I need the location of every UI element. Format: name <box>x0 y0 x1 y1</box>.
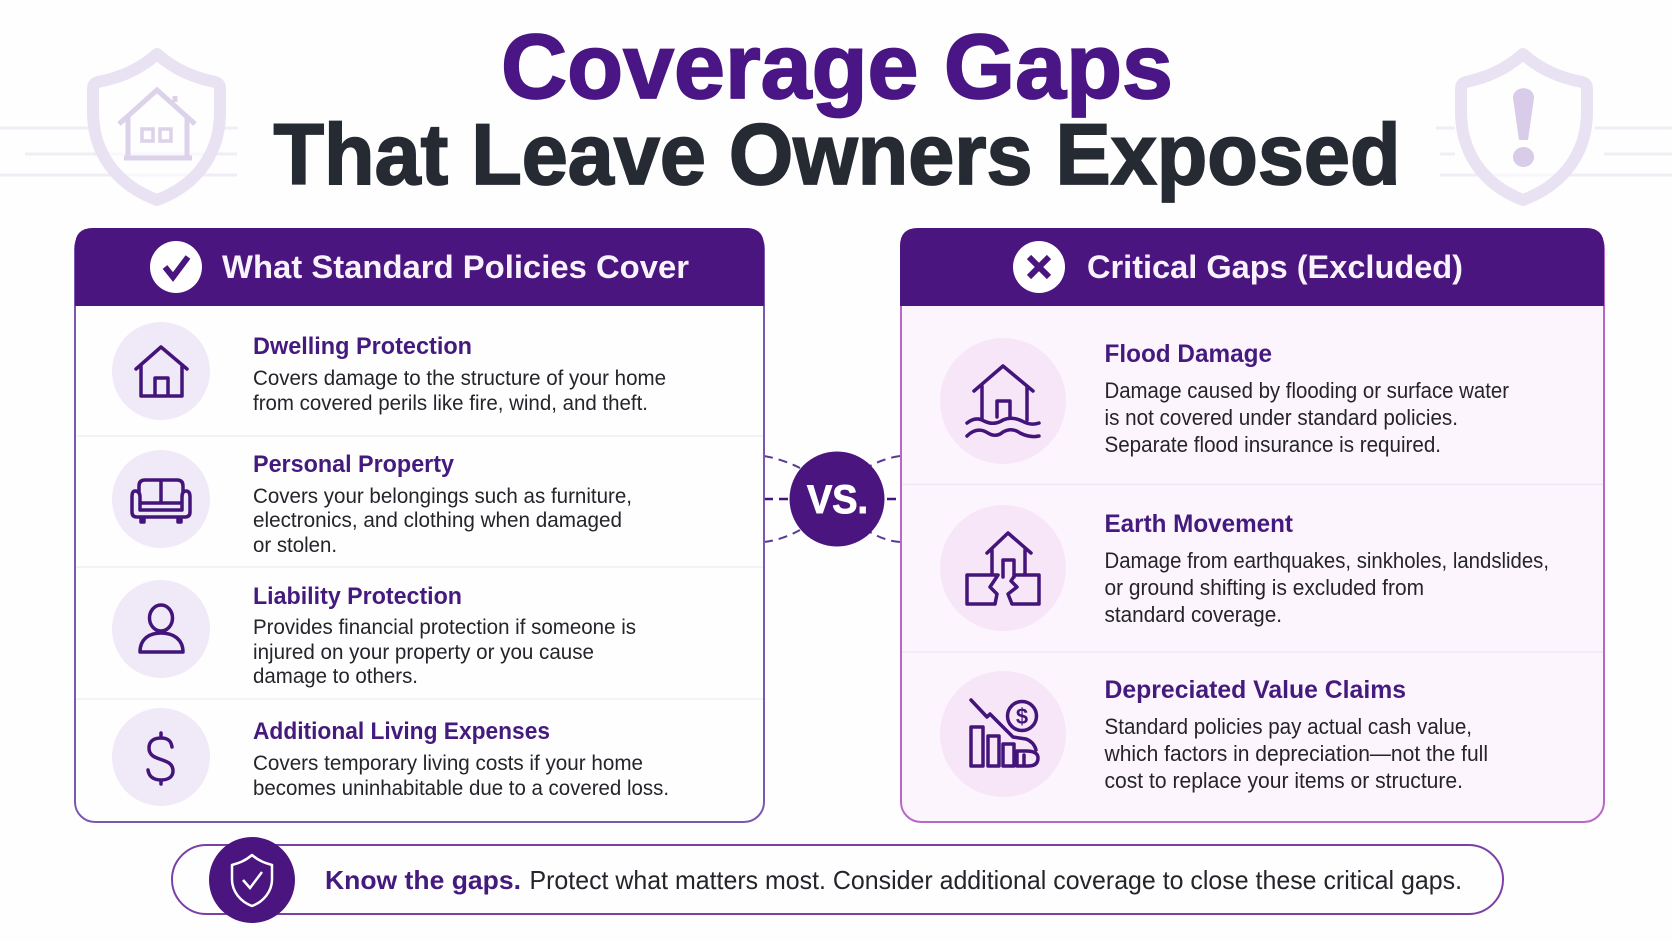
item: personal property: electronics, and clothing when damaged <box>253 509 622 532</box>
item: liability protection: Liability Protection <box>253 583 462 610</box>
item: earth movement <box>940 505 1549 631</box>
icon: shield with exclamation mark <box>1461 54 1587 200</box>
header bar: excluded <box>900 228 1604 306</box>
item: depreciated value claims <box>940 671 1488 797</box>
item: earth movement: standard coverage. <box>1104 602 1282 627</box>
item: flood damage: Separate flood insurance is required. <box>1104 432 1441 457</box>
item: additional living expenses: Covers temporary living costs if your home <box>253 752 643 775</box>
item: depreciated value claims: which factors in depreciation—not the full <box>1104 741 1488 766</box>
item: additional living expenses: Additional Living Expenses <box>253 718 550 745</box>
item: flood damage: is not covered under standard policies. <box>1104 405 1458 430</box>
callout text: Know the gaps. <box>325 865 521 895</box>
item: liability protection: damage to others. <box>253 665 418 688</box>
item: flood damage <box>940 338 1509 464</box>
item: additional living expenses: becomes uninhabitable due to a covered loss. <box>253 777 669 800</box>
connector: VS dashed lines <box>764 456 900 542</box>
callout text: Protect what matters most. Consider additional coverage to close these critical gaps. <box>530 865 1462 895</box>
item: dwelling protection: from covered perils like fire, wind, and theft. <box>253 392 648 415</box>
callout: know the gaps <box>172 837 1503 923</box>
item: depreciated value claims: $ <box>1016 704 1028 729</box>
item: flood damage: Damage caused by flooding or surface water <box>1104 378 1509 403</box>
header bar: covered: What Standard Policies Cover <box>222 249 689 285</box>
badge: VS: VS. <box>807 478 868 522</box>
icon: shield with house <box>93 54 220 200</box>
item: earth movement: or ground shifting is excluded from <box>1104 575 1424 600</box>
header bar: covered <box>75 228 764 306</box>
item: personal property: or stolen. <box>253 534 337 557</box>
title: That Leave Owners Exposed <box>274 107 1400 203</box>
item: personal property <box>112 450 632 557</box>
title: Coverage Gaps <box>501 16 1173 118</box>
item: liability protection <box>112 580 636 688</box>
panel: what standard policies cover <box>75 228 764 822</box>
badge: VS <box>790 452 884 546</box>
item: depreciated value claims: Standard policies pay actual cash value, <box>1104 714 1472 739</box>
item: liability protection: Provides financial protection if someone is <box>253 616 636 639</box>
item: earth movement: Damage from earthquakes, sinkholes, landslides, <box>1104 548 1549 573</box>
item: personal property: Personal Property <box>253 451 455 478</box>
item: liability protection: injured on your property or you cause <box>253 641 594 664</box>
item: depreciated value claims: Depreciated Value Claims <box>1104 676 1406 704</box>
item: dwelling protection: Covers damage to the structure of your home <box>253 367 666 390</box>
item: earth movement: Earth Movement <box>1104 510 1294 538</box>
panel: critical gaps <box>900 228 1604 822</box>
item: flood damage: Flood Damage <box>1104 340 1272 368</box>
header bar: excluded: Critical Gaps (Excluded) <box>1087 249 1463 285</box>
title <box>274 16 1400 203</box>
item: depreciated value claims: cost to replace your items or structure. <box>1104 768 1463 793</box>
icon: shield check <box>209 837 295 923</box>
item: dwelling protection: Dwelling Protection <box>253 333 472 360</box>
item: additional living expenses <box>112 708 669 806</box>
item: dwelling protection <box>112 322 666 420</box>
item: personal property: Covers your belongings such as furniture, <box>253 485 632 508</box>
